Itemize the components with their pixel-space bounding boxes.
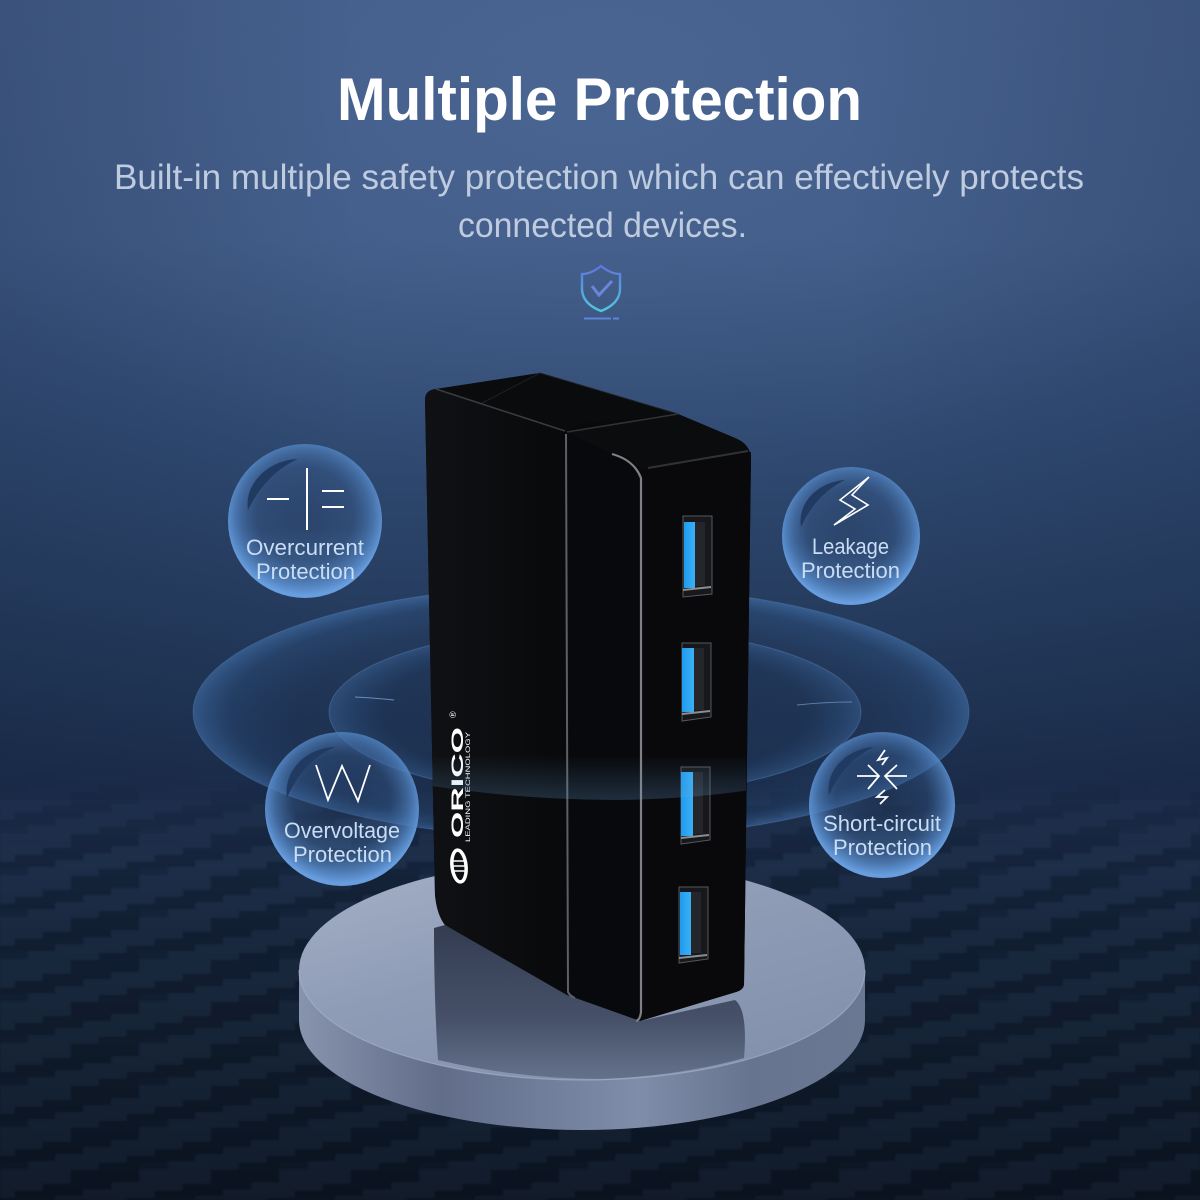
subtitle: connected devices. xyxy=(458,206,747,245)
device port face xyxy=(640,452,751,1021)
USB port 4 xyxy=(679,887,708,963)
bubble: short-circuit protection xyxy=(809,732,955,878)
protection rings xyxy=(193,585,969,839)
USB port 1 xyxy=(683,516,712,597)
USB port 2 xyxy=(682,643,711,721)
icon: converging arrows and sparks xyxy=(857,750,907,804)
device top cap xyxy=(567,414,751,470)
subtitle: Built-in multiple safety protection which can effectively protects xyxy=(114,158,1084,197)
ORICO logo: ® xyxy=(448,711,458,718)
bubble: leakage protection: Leakage xyxy=(812,534,889,559)
device middle face xyxy=(567,436,640,1020)
ORICO logo xyxy=(448,711,472,883)
bubble: leakage protection: Protection xyxy=(801,558,900,583)
device silhouette xyxy=(425,373,751,1021)
USB port 3 xyxy=(681,767,710,844)
USB hub device xyxy=(425,373,751,1021)
bubble: overcurrent protection: Protection xyxy=(256,559,355,584)
ORICO logo: LEADING TECHNOLOGY xyxy=(465,731,472,842)
device side face xyxy=(425,389,567,995)
ring passing over device xyxy=(432,763,746,800)
bubble: short-circuit protection: Protection xyxy=(833,835,932,860)
device rear top xyxy=(436,373,678,432)
bubble: overcurrent protection xyxy=(228,444,382,598)
ORICO logo: ORICO xyxy=(448,727,467,838)
bubble: short-circuit protection: Short-circuit xyxy=(823,811,941,836)
icon: overcurrent symbol xyxy=(267,468,344,530)
title: Multiple Protection xyxy=(337,66,862,133)
icon: lightning bolt xyxy=(834,477,869,525)
bubble: overcurrent protection: Overcurrent xyxy=(246,535,364,560)
bubble: leakage protection xyxy=(782,467,920,605)
icon: shield with check xyxy=(582,266,620,318)
bubble: overvoltage protection: Overvoltage xyxy=(284,818,400,843)
bubble: overvoltage protection xyxy=(265,732,419,886)
display disc xyxy=(299,860,865,1130)
icon: W symbol xyxy=(316,765,370,801)
shadow of device on disc xyxy=(434,925,745,1079)
bubble: overvoltage protection: Protection xyxy=(293,842,392,867)
subtitle xyxy=(114,158,1084,245)
